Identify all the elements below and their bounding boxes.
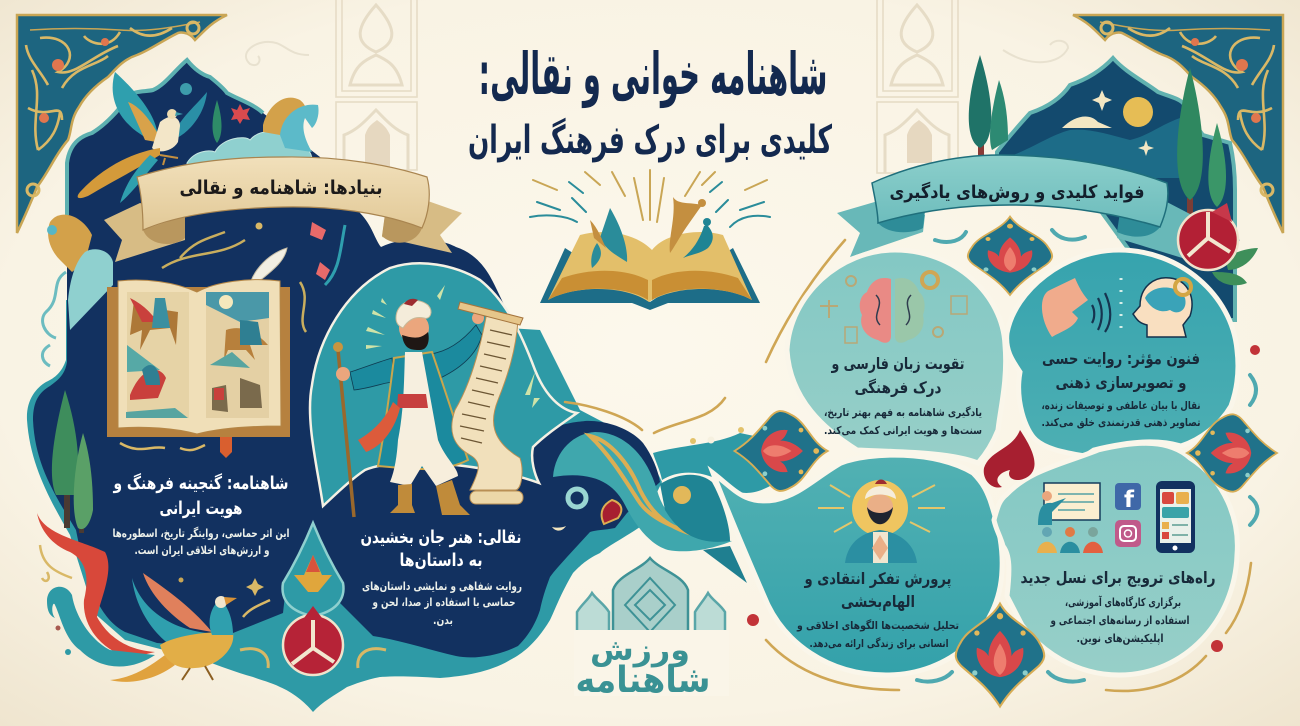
panel: bubble language <box>787 250 1006 463</box>
text: language: درک فرهنگی <box>854 378 942 397</box>
left small cloud <box>68 249 113 330</box>
heading: naqqali block: بدن. <box>433 613 453 627</box>
title: کلیدی برای درک فرهنگ ایران <box>468 117 832 163</box>
text: technique: فنون مؤثر: روایت حسی <box>1042 349 1200 368</box>
left navy panel group <box>27 60 732 712</box>
calligraphy emblem: ورزش <box>590 633 690 668</box>
manuscript book <box>107 280 290 458</box>
text: technique: و تصویرسازی ذهنی <box>1056 373 1186 392</box>
small decorations around lower phoenix <box>40 545 270 655</box>
decorative pale architectural panel left <box>336 0 417 170</box>
main navy fill with arch <box>33 60 660 657</box>
text: technique <box>1042 349 1200 429</box>
medallion right <box>1187 414 1277 492</box>
heading: naqqali block <box>360 528 522 627</box>
text: promotion: راه‌های ترویج برای نسل جدید <box>1020 568 1216 587</box>
narrator figure <box>333 299 484 517</box>
left banner: بنیادها: شاهنامه و نقالی <box>180 177 382 199</box>
cypress trees left <box>52 390 93 533</box>
quill <box>249 248 287 290</box>
icon: head with brain <box>1133 278 1192 337</box>
right banner: فواید کلیدی و روش‌های یادگیری <box>890 181 1144 203</box>
text: technique: نقال با بیان عاطفی و توصیفات زنده، <box>1042 399 1200 412</box>
medallion top <box>968 217 1052 295</box>
heading: shahnameh block: و ارزش‌های اخلاقی ایران است. <box>134 543 270 558</box>
cypress small <box>212 100 222 143</box>
medallion left <box>734 411 828 491</box>
heading: shahnameh block: این اثر حماسی، روایتگر تاریخ، اسطوره‌ها <box>112 526 290 541</box>
dark swirl on connector <box>660 475 747 583</box>
wave ribbon <box>552 432 732 551</box>
right banner <box>837 155 1240 268</box>
heading: naqqali block: نقالی: هنر جان بخشیدن <box>360 528 522 548</box>
text: promotion: اپلیکیشن‌های نوین. <box>1076 632 1164 645</box>
pomegranate lower left <box>240 523 386 675</box>
medallion bottom <box>956 604 1044 706</box>
lower phoenix <box>37 513 237 682</box>
left small beast <box>47 215 92 272</box>
corner ornament top left <box>17 15 227 233</box>
heading: naqqali block: حماسی با استفاده از صدا، لحن و <box>372 595 516 610</box>
text: language <box>824 354 982 437</box>
star flower <box>231 104 250 124</box>
gold flourish arcs <box>565 240 1251 691</box>
text: critical thinking: تحلیل شخصیت‌ها الگوهای اخلاقی و <box>796 619 959 632</box>
text: critical thinking: پرورش تفکر انتقادی و <box>804 569 952 589</box>
connector dots <box>690 427 744 444</box>
cypress trees right arch <box>969 55 1226 220</box>
icon: brain <box>820 272 967 343</box>
icon: teacher and audience <box>1037 483 1103 553</box>
top left phoenix <box>78 72 207 203</box>
teal outer band of lower left panel <box>27 300 662 712</box>
text: promotion: استفاده از رسانه‌های اجتماعی و <box>1050 614 1190 627</box>
teal curls beside medallions <box>917 230 1258 682</box>
icon: facebook: f <box>1124 487 1135 513</box>
teal flourish far left <box>42 272 66 366</box>
central open book with dancing figures <box>530 170 770 310</box>
sparkles in teal circle <box>366 285 540 408</box>
heading: naqqali block: روایت شفاهی و نمایشی داستان‌های <box>362 579 522 594</box>
text: language: سنت‌ها و هویت ایرانی کمک می‌کند. <box>824 424 982 437</box>
corner ornament top right <box>1073 15 1283 233</box>
panel: bubble promotion <box>994 443 1237 675</box>
panel: bubble technique <box>1007 250 1238 456</box>
text: language: تقویت زبان فارسی و <box>831 354 964 373</box>
icon: praying sage <box>818 480 945 563</box>
heading: shahnameh block <box>112 473 290 558</box>
icon: speaking face <box>1042 278 1121 337</box>
red flourish centre of bubbles <box>984 430 1035 488</box>
panel: bubble critical thinking <box>713 455 1002 675</box>
left banner <box>104 157 462 262</box>
narrator scroll <box>452 302 523 504</box>
text: technique: تصاویر ذهنی قدرتمندی خلق می‌کند. <box>1042 416 1200 429</box>
decorative pale architectural panel right <box>877 0 958 173</box>
arch teal outline <box>67 60 263 215</box>
title <box>468 40 832 163</box>
calligraphy emblem <box>574 558 729 701</box>
text: language: یادگیری شاهنامه به فهم بهتر تاریخ، <box>824 406 982 419</box>
vines and tulips <box>162 222 345 332</box>
heading: shahnameh block: هویت ایرانی <box>160 499 242 519</box>
text: critical thinking: انسانی برای زندگی ارائه می‌دهد. <box>810 637 948 650</box>
calligraphy emblem: شاهنامه <box>576 660 710 701</box>
text: critical thinking: الهام‌بخشی <box>841 592 915 611</box>
text: promotion <box>1020 568 1216 645</box>
narrator teal circle <box>310 263 577 506</box>
heading: naqqali block: به داستان‌ها <box>400 551 482 571</box>
small red dots <box>747 345 1260 652</box>
icon: facebook <box>1115 483 1141 513</box>
text: critical thinking <box>796 569 959 650</box>
panel: right arch scene <box>997 58 1235 320</box>
pomegranate top right <box>1178 203 1258 285</box>
text: promotion: برگزاری کارگاه‌های آموزشی، <box>1065 595 1181 609</box>
title: شاهنامه خوانی و نقالی: <box>478 40 828 109</box>
icon: smartphone <box>1156 481 1195 553</box>
heading: shahnameh block: شاهنامه: گنجینه فرهنگ و <box>113 473 288 494</box>
arch moon <box>180 83 192 95</box>
cloud and dragon head <box>187 98 319 170</box>
icon: instagram <box>1115 520 1141 547</box>
pale cloud outlines <box>246 41 1068 65</box>
centre-right teal connector ribbon <box>653 433 790 493</box>
